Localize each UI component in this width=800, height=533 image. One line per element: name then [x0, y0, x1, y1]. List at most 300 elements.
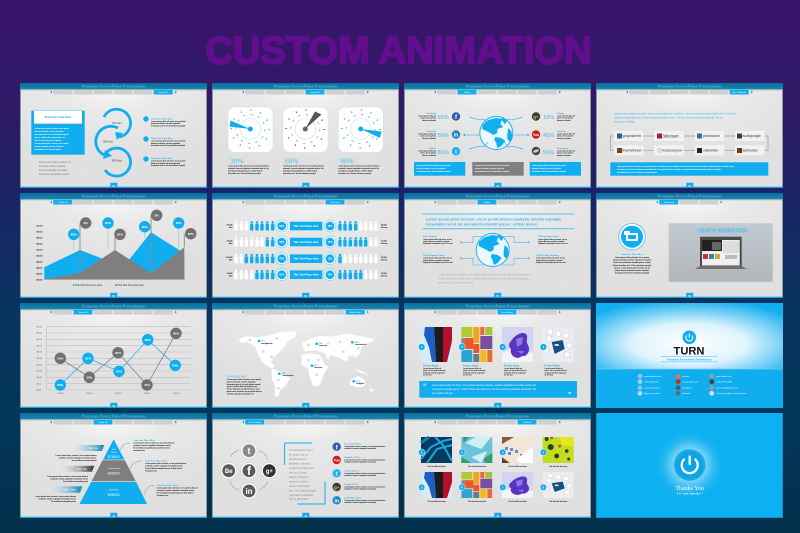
page numbers — [112, 185, 692, 518]
page numbers: 02 — [304, 185, 308, 188]
grey series: 60% — [115, 351, 121, 355]
item left top: 500 Countries — [423, 235, 437, 238]
grid and axis labels — [37, 326, 191, 395]
right text 3: Lorem ipsum dolor sit amet, vix an primis discere — [157, 487, 198, 490]
row 2: 10,000 — [227, 240, 232, 242]
row 1: 96,000 — [381, 224, 387, 226]
stat Facebook — [418, 112, 460, 122]
caption 80%: Lorem ipsum dolor sit amet, vix an primis discere — [338, 164, 379, 168]
row 4 — [227, 269, 387, 281]
row 4: Men — [229, 276, 232, 278]
slide: TURN contact — [596, 303, 783, 408]
text item 3: Lorem ipsum dolor sit amet, vix an primis — [151, 160, 185, 163]
text item 1: discere molestie, inermis vulputate — [151, 122, 180, 125]
stat Deviantart: amet, vix an primis — [557, 152, 573, 155]
item right bottom: 50000 People Working — [536, 254, 560, 257]
row 3: 120,000 — [226, 257, 232, 259]
caption 30%: Lorem ipsum dolor sit amet, vix an primis discere — [228, 164, 269, 168]
blue text box: ferendum nec. Vel an minimum percipit lobortis. Lorem ipsum dolor sit amet, vix an primis discere molestie, inermis vulputate — [617, 168, 721, 171]
subtitle — [661, 356, 718, 362]
pyramid: Third — [112, 448, 116, 451]
y axis labels: $75.00 — [36, 226, 42, 228]
slide: Graph 03 area chart — [20, 193, 207, 298]
panel: blue text box: Main Text Come Here — [45, 116, 72, 119]
slide: Globe — [404, 193, 591, 298]
map markers: Lorem ipsum — [314, 367, 323, 369]
caption 80% — [338, 156, 380, 175]
row 4: 55,000 — [227, 273, 232, 275]
stat Facebook: amet, vix an primis — [420, 117, 436, 120]
y axis labels: $40.00 — [36, 268, 42, 270]
item right bottom: primis discere molestie, inermis — [536, 259, 562, 262]
contact column 2: dimiter.tel — [682, 392, 691, 395]
social list: Google: molestie, inermis vulputate honestatis — [344, 488, 376, 491]
blue text box — [610, 162, 768, 176]
grid and axis labels: $25.00 — [37, 358, 42, 360]
grid and axis labels: $20.00 — [37, 364, 42, 366]
slide: Graph 02 dials — [212, 83, 399, 188]
text item 2: Lorem ipsum dolor sit amet, vix an primis — [151, 140, 185, 143]
contact column 3: your website.com — [716, 375, 732, 378]
blue series: 50% — [116, 369, 122, 373]
right text 1: molestie, inermis vulputate honestatis mel at. — [133, 444, 171, 447]
slide: Graph 03 area chart: Premium PowerPoint Presentation — [82, 194, 146, 199]
headline: Lorem ipsum dolor sit amet, vix an primis discere molestie, inermis vulputate — [426, 217, 561, 221]
headline: honestatis mel at. Ea mel laboris impedit epicuri, ut liber dolore — [426, 222, 537, 226]
social list: Facebook: f — [336, 445, 339, 451]
text block: honestatis mel at. Ea mel laboris impedit — [615, 272, 649, 275]
step two: Lorem ipsum dolor sit amet, vix an primis discere — [47, 475, 88, 478]
stat Deviantart — [532, 147, 576, 157]
portfolio row 1: This text title text here — [549, 465, 567, 468]
area chart — [44, 215, 185, 280]
slide: Social Media: Social Media — [249, 422, 262, 424]
row 2: Women — [381, 243, 387, 245]
project 1: 1 — [421, 345, 423, 349]
slide: Social Media — [212, 413, 399, 518]
stat Google: Lorem ipsum dolor sit — [557, 114, 576, 118]
item left bottom: Lorem ipsum dolor sit amet, vix an — [423, 257, 452, 260]
slide: Global Map — [212, 303, 399, 408]
box left — [414, 162, 465, 176]
page numbers: 13 — [304, 515, 308, 518]
slide: Thanks You — [596, 413, 783, 518]
row 3: Women — [381, 260, 387, 262]
stat YouTube — [532, 130, 576, 140]
text block: dolore ferendum nec. Vel an minimum percipit — [613, 264, 652, 267]
panel: blue text box: honestatis mel at. Ea mel laboris impedit — [34, 133, 69, 136]
text item 1: honestatis mel at. Ea mel laboris impedit — [151, 124, 185, 127]
stat Twitter: t — [455, 149, 457, 155]
text block: primis discere molestie inermis vulputate — [615, 269, 649, 272]
grid and axis labels: 1/3/2002 — [115, 393, 122, 395]
project 4: molestie inermis vulputate — [544, 371, 566, 374]
bracket text: molestie, inermis — [289, 462, 311, 466]
stat Facebook: Facebook — [426, 112, 437, 115]
row 2: 77,000 — [381, 240, 387, 242]
caption 80%: ferendum nec. Vel an minimum percipit — [338, 172, 371, 175]
social list: Google — [332, 483, 385, 491]
stat Facebook: discere molestie — [422, 119, 436, 122]
slide: Social Media: Premium PowerPoint Presentation — [274, 414, 338, 419]
project 1: at. Ea mel — [423, 374, 432, 377]
portfolio row 2 — [418, 472, 574, 503]
bubbles — [68, 210, 196, 240]
social list: LinkedIn: in — [334, 498, 339, 504]
portfolio row 2: This text title text here — [549, 500, 567, 503]
bubbles: $4% — [176, 221, 182, 225]
item left top: vulputate honestatis mel at. Ea mel — [423, 242, 453, 245]
map markers: 60% — [282, 373, 286, 375]
stat Deviantart: discere molestie — [557, 154, 571, 157]
caption 80%: 80% — [340, 156, 354, 166]
row 2: Men — [229, 243, 232, 245]
right text 3 — [157, 484, 198, 497]
circular arrows — [96, 109, 131, 176]
stat LinkedIn: LinkedIn — [426, 130, 437, 133]
row 3: 75% — [279, 258, 285, 261]
bubbles: $% — [84, 221, 88, 225]
box centre — [472, 162, 524, 176]
page numbers: 08 — [688, 295, 692, 298]
text item 3 — [143, 156, 185, 167]
intro text: laboris impedit epicuri, ut liber dolore ferendum nec. Vel an minimum percipit lobortis. Vel at — [614, 115, 723, 119]
row 4: 78,000 — [381, 273, 387, 275]
panel: blue text box: Lorem ipsum dolor sit amet, vix an primis — [34, 142, 69, 145]
project 3: 3 — [502, 345, 504, 349]
brand connectors — [610, 136, 768, 150]
scalable map text: epicuri, ut liber dolore ferendum nec. — [227, 385, 258, 388]
stat Facebook: Lorem ipsum dolor sit — [418, 114, 436, 118]
bracket text: primis discere — [289, 457, 307, 461]
stat LinkedIn: discere molestie — [422, 137, 436, 140]
slide: Globe: Globe — [484, 202, 491, 204]
stat Deviantart: Lorem ipsum dolor sit — [557, 150, 576, 152]
project 3: Lorem ipsum dolor sit — [504, 367, 523, 370]
box centre: honestatis mel at. Ea mel laboris impedit — [475, 170, 509, 173]
circular arrows: 1ST Fact — [112, 122, 122, 125]
right text 2: Lorem ipsum dolor sit amet, vix an primis discere — [145, 462, 186, 465]
slide: Graph 06 pyramid: Graph 06 — [98, 421, 108, 424]
text item 3: honestatis mel at. Ea mel laboris impedit — [151, 164, 185, 167]
grid and axis labels: 1/2/2002 — [86, 393, 93, 395]
page numbers: 04 — [688, 185, 692, 188]
project 4: at. Ea mel — [544, 374, 554, 377]
social list: YouTube: Lorem ipsum dolor sit amet, vix an primis discere — [344, 458, 385, 462]
icon: power logo — [682, 330, 696, 344]
blue text box: honestatis mel at, Ea mel laboris impedit epicuri. — [617, 171, 658, 174]
right text 2: Your Text Place Here — [145, 460, 167, 462]
scalable map text: Vel an minimum percipit lobortis. Lorem — [227, 388, 260, 391]
bracket text: nec. Vel cum nonumy — [289, 488, 316, 492]
row 1: 80% — [279, 225, 285, 228]
pyramid: $75000 — [108, 455, 120, 459]
slide: Showcase: Showcase — [664, 202, 675, 204]
caption 60%: Lorem ipsum dolor sit amet, vix an primis discere — [283, 164, 324, 168]
bubbles: $2% — [117, 232, 123, 236]
stat LinkedIn: in — [454, 132, 458, 138]
stat Google: amet, vix an primis — [557, 117, 573, 120]
slide: Graph 02 dials: Graph 02 — [310, 91, 320, 94]
slide: Graph 04 line chart — [20, 303, 207, 408]
icon: camera badge — [619, 224, 645, 250]
blue text box: Lorem ipsum dolor sit amet, vix an primis discere molestie, inermis vulputate honestatis mel at. Ea mel laboris impedit epicuri, ut liber dolore — [617, 165, 734, 168]
page numbers: 06 — [304, 295, 308, 298]
slide: Graph 04 line chart: Graph 04 — [78, 311, 88, 314]
dial 30% — [228, 107, 273, 152]
slide: Graph 01 circular arrows: Graph 01 — [158, 91, 168, 94]
quote: at. Ea mel laboris impedit epicuri, ut liber dolore ferendum nec. Vel cum nonumy postulant — [438, 278, 530, 280]
y axis labels: $35.00 — [36, 274, 42, 276]
y axis labels: $60.00 — [36, 244, 42, 246]
bubbles: $3% — [188, 232, 194, 236]
caption 60%: molestie, inermis vulputate honestatis mel at. Ea — [283, 167, 325, 170]
slide: Graph 02 dials: Premium PowerPoint Presentation — [274, 84, 338, 89]
portfolio row 2: This text title text here — [508, 500, 527, 503]
pyramid: $95000 — [108, 493, 120, 497]
panel: blue text box: discere molestie, inermis vulputate — [34, 145, 64, 148]
slide: Inventory people rows: Inventory — [330, 201, 340, 204]
grid and axis labels: $40.00 — [37, 339, 42, 341]
portfolio row 1: 1 — [421, 450, 423, 454]
slide: Our Project: Our Project — [501, 311, 513, 314]
quote text — [31, 158, 86, 181]
social wheel: t — [248, 446, 250, 456]
right text 3: Your Text Place Here — [157, 484, 178, 487]
caption 80%: molestie, inermis vulputate honestatis mel at. Ea — [338, 167, 380, 170]
stat LinkedIn — [418, 130, 460, 140]
slide: Inventory people rows — [212, 193, 399, 298]
social wheel: in — [245, 487, 253, 496]
bracket text: vulputate honestatis — [289, 466, 314, 470]
page numbers: 09 — [112, 405, 116, 408]
quote — [430, 270, 563, 287]
quote text: mel at. Ea mel laboris impedit — [39, 173, 69, 176]
globe with connectors — [460, 234, 530, 266]
map markers: Lorem ipsum dolor — [355, 344, 367, 346]
stat YouTube: Lorem ipsum dolor sit — [557, 132, 576, 136]
slide: Global Map: Premium PowerPoint Presentation — [274, 304, 338, 309]
circular arrows: 3RD Fact — [112, 160, 122, 162]
box centre: Lorem ipsum dolor sit amet, vix an primis — [475, 164, 509, 167]
slide: Our Project: Premium PowerPoint Presentation — [466, 304, 530, 309]
world map — [239, 332, 375, 397]
project 1: Lorem ipsum dolor sit — [423, 367, 442, 370]
row 1 — [227, 220, 387, 232]
intro text — [614, 111, 736, 123]
text item 2: Your Text Place Here — [151, 137, 173, 140]
panel: blue text box: Vel an minimum percipit lobortis — [34, 139, 61, 142]
quote box: “ — [423, 384, 426, 390]
map markers: Lorem ipsum dolor — [282, 375, 294, 377]
bracket text: Vel at menitum — [289, 497, 308, 501]
title: CUSTOM ANIMATION — [206, 29, 592, 72]
closing message — [675, 486, 704, 495]
box right: honestatis mel at. Ea mel laboris impedit — [532, 170, 566, 173]
quote text: Lorem ipsum dolor sit amet, vix — [39, 161, 72, 164]
scalable map text: honestatis mel at. Ea mel laboris impedit — [227, 383, 261, 386]
page numbers: 05 — [112, 295, 116, 298]
contact column 2 — [676, 374, 699, 396]
project 3: at. Ea mel — [504, 374, 513, 377]
page numbers: 10 — [304, 405, 308, 408]
caption 60% — [283, 156, 325, 175]
portfolio row 2: 5 — [421, 485, 423, 489]
social list: YouTube: molestie, inermis vulputate honestatis — [344, 461, 376, 464]
closing message: Thanks You — [675, 486, 704, 492]
stat Twitter: 85% — [438, 150, 449, 156]
bracket text: postulant prodesset. — [289, 493, 314, 497]
slide: Graph 06 pyramid: Premium PowerPoint Presentation — [82, 414, 146, 419]
quote: Lorem ipsum dolor sit amet, vix an primis discere molestie, inermis vulputate honestatis mel — [438, 274, 532, 276]
brand chips: audiojungle — [742, 134, 761, 138]
panel: blue text box: honestatis mel at ea mel laboris — [34, 148, 61, 151]
item left top: Lorem ipsum dolor sit amet, vix an — [423, 238, 452, 241]
slide: Graph 03 area chart: Graph 03 — [58, 201, 68, 204]
contact column 3 — [709, 374, 748, 396]
intro text: minimum indicatit — [614, 119, 635, 123]
item right bottom: vulputate honestatis mel at. Ea mel — [536, 261, 566, 264]
project 2: amet, vix an primis discere — [463, 369, 485, 372]
blue series: 60% — [172, 363, 179, 367]
stat Google: discere molestie — [557, 119, 571, 122]
row 4: Title Text Place Here — [293, 273, 319, 277]
caption 30%: molestie, inermis vulputate honestatis mel at. Ea — [228, 167, 270, 170]
grid and axis labels: $45.00 — [37, 333, 42, 335]
slide: Portfolio: Premium PowerPoint Presentation — [466, 414, 530, 419]
portfolio row 2: 8 — [543, 485, 545, 489]
caption 30% — [228, 156, 270, 175]
brand chips: photodune — [703, 134, 720, 138]
slide: Your 3 Brands: Premium PowerPoint Presentation — [658, 84, 722, 89]
box centre: discere molestie, inermis vulputate — [475, 167, 504, 170]
contact column 3: +381 99 65 64084 — [716, 381, 733, 383]
row 4: 55% — [279, 274, 285, 277]
slide: World social stats — [404, 83, 591, 188]
social list: Twitter: Twitter (35%) — [344, 470, 359, 472]
grid and axis labels: $35.00 — [37, 345, 42, 347]
text block: Lorem ipsum dolor sit amet, vix an primis — [615, 256, 649, 259]
row 3: 52,000 — [381, 257, 387, 259]
row 1: 40% — [328, 225, 333, 228]
slide: World social stats: Premium PowerPoint Presentation — [466, 84, 530, 89]
page numbers: 01 — [112, 185, 116, 188]
slide: Your 3 Brands: Your 3 Brands — [732, 91, 747, 94]
item left top: primis discere molestie, inermis — [423, 240, 449, 243]
grid and axis labels: 1/1/2002 — [57, 393, 64, 395]
panel: blue text box — [31, 111, 85, 155]
row 2: 77% — [328, 241, 333, 244]
bracket text: Lorem ipsum dolor — [289, 448, 313, 452]
stat Twitter: discere molestie — [422, 154, 436, 157]
slide: Portfolio — [404, 413, 591, 518]
slide: Inventory people rows: Premium PowerPoint Presentation — [274, 194, 338, 199]
text item 2: discere molestie, inermis vulputate — [151, 142, 180, 145]
right text 1 — [133, 439, 174, 452]
page numbers: 11 — [496, 405, 500, 408]
bracket text: dolore ferendum — [289, 484, 310, 488]
project 2: Lorem ipsum dolor sit — [463, 367, 482, 370]
item right top: 500 Opening Project — [538, 235, 559, 238]
project 2: molestie inermis vulputate — [463, 371, 485, 374]
step three: Ea mel laboris impedit epicuri — [51, 500, 77, 503]
project 1: molestie inermis vulputate — [423, 371, 445, 374]
text item 1: Lorem ipsum dolor sit amet, vix an primis — [151, 120, 185, 123]
grey series: 90% — [173, 331, 179, 335]
social list: Google: Google (51%) — [344, 483, 359, 486]
contact column 1: www.twitter.com — [644, 380, 659, 383]
social wheel: f — [247, 464, 252, 478]
y axis labels: $45.00 — [36, 262, 42, 264]
grid and axis labels: $15.00 — [37, 371, 42, 373]
quote: prodesset. Vel at menitum indicatit — [438, 282, 474, 284]
bracket text: epicuri, ut liber — [289, 480, 308, 484]
contact column 3: Your street address and goes here — [716, 392, 748, 395]
y axis labels: $50.00 — [36, 256, 42, 258]
item right top: Lorem ipsum dolor sit amet, vix an — [538, 238, 567, 241]
portfolio row 1: This text title text here — [508, 465, 527, 468]
project 1 — [418, 327, 452, 377]
right text 1: Ea mel laboris impedit epicuri ut liber dolore — [133, 446, 170, 449]
step one: molestie, inermis vulputate honestatis mel at. — [59, 456, 97, 459]
bracket text — [285, 443, 325, 504]
slide: Graph 06 pyramid — [20, 413, 207, 518]
slide: Global Map: Global Map — [349, 312, 361, 314]
right text 2: molestie, inermis vulputate honestatis mel at. — [145, 464, 183, 468]
scalable map text: discere molestie, inermis vulputate — [227, 380, 256, 383]
stat LinkedIn: amet, vix an primis — [420, 135, 436, 138]
panel: laptop image: CREATIVE PRESENTATION . — [697, 228, 750, 234]
stat Google: 18% — [543, 115, 554, 121]
box left: discere molestie, inermis vulputate — [416, 167, 446, 170]
item left bottom: 500 Premium Clients — [423, 254, 445, 257]
portfolio row 1: 4 — [543, 450, 545, 454]
scalable map text: ipsum dolor sit amet, vix an primis discere — [227, 390, 262, 393]
legend: Title Text One Goes Here — [75, 284, 103, 287]
bubbles: $5% — [105, 221, 111, 225]
step two — [47, 466, 94, 483]
row 3 — [226, 253, 387, 265]
panel: blue text box: discere molestie, inermis vulputate — [34, 130, 64, 133]
portfolio row 2: This text title text here — [427, 500, 446, 503]
quote text: an primis discere molestie, — [39, 165, 67, 168]
slide: Graph 01 circular arrows — [20, 83, 207, 188]
item left bottom: primis discere molestie, inermis — [423, 259, 449, 262]
row 1: Men — [229, 227, 232, 229]
social list: LinkedIn — [332, 496, 385, 504]
item right top: vulputate honestatis mel at. Ea mel — [538, 242, 568, 245]
grid and axis labels: $30.00 — [37, 352, 42, 354]
row 2: Title Text Place Here — [293, 240, 319, 244]
blue series: 50% — [85, 356, 91, 360]
social list: Facebook: molestie, inermis vulputate honestatis — [344, 447, 376, 450]
brand name: TURN — [674, 346, 705, 358]
text block: mel at. Ea mel laboris impedit epicuri, ut liber — [613, 261, 651, 264]
row 1: Women — [381, 227, 387, 229]
right text 2 — [145, 460, 186, 472]
dial 80% — [338, 107, 383, 152]
bracket text: laboris impedit — [289, 475, 308, 479]
portfolio row 1: This text title text here — [468, 465, 486, 468]
step three: Step Three — [64, 489, 77, 492]
curved arrows — [120, 443, 154, 495]
social list: Facebook: Lorem ipsum dolor sit amet, vix an primis discere — [344, 445, 385, 448]
slide: Graph 04 line chart: Premium PowerPoint Presentation — [82, 304, 146, 309]
caption 60%: ferendum nec. Vel an minimum percipit — [283, 172, 316, 175]
pyramid — [80, 439, 147, 504]
blue series: 80% — [145, 338, 151, 342]
icon: power button — [674, 449, 706, 481]
